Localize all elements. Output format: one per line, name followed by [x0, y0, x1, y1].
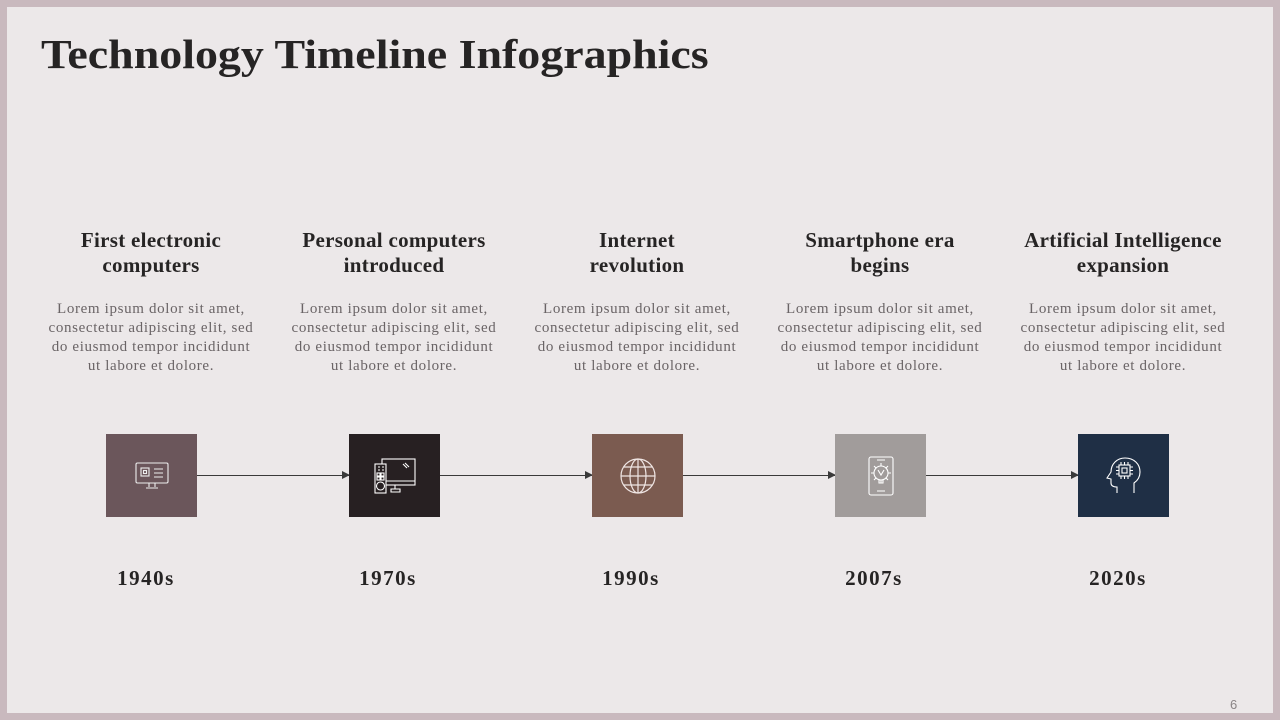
- text block: 1990s: Internet: [599, 228, 675, 252]
- text block: 2020s: [1021, 228, 1225, 374]
- text block: 1990s: revolution: [590, 253, 684, 277]
- page number: 6: [1230, 697, 1237, 712]
- text block: 1940s: computers: [102, 253, 200, 277]
- text block: 2020s: expansion: [1077, 253, 1169, 277]
- text block: 2007s: ut labore et dolore.: [817, 358, 943, 374]
- icon: AI head: [1078, 434, 1169, 517]
- text block: 2020s: Lorem ipsum dolor sit amet,: [1029, 301, 1217, 317]
- text block: 2007s: Lorem ipsum dolor sit amet,: [786, 301, 974, 317]
- text block: 1970s: Personal computers: [302, 228, 486, 252]
- text block: 1970s: do eiusmod tempor incididunt: [295, 339, 493, 355]
- text block: 1990s: do eiusmod tempor incididunt: [538, 339, 736, 355]
- text block: 1970s: consectetur adipiscing elit, sed: [292, 320, 496, 336]
- icon: smartphone with gear: [835, 434, 926, 517]
- arrow 2: [440, 475, 592, 476]
- text block: 1990s: consectetur adipiscing elit, sed: [535, 320, 739, 336]
- text block: 2007s: consectetur adipiscing elit, sed: [778, 320, 982, 336]
- text block: 1970s: [292, 228, 496, 374]
- text block: 1940s: consectetur adipiscing elit, sed: [49, 320, 253, 336]
- icon: computer with chip: [106, 434, 197, 517]
- text block: 2007s: Smartphone era: [805, 228, 955, 252]
- text block: 1940s: [49, 228, 253, 374]
- text block: 2020s: do eiusmod tempor incididunt: [1024, 339, 1222, 355]
- text block: 1970s: introduced: [344, 253, 444, 277]
- text block: 2020s: consectetur adipiscing elit, sed: [1021, 320, 1225, 336]
- text block: 1940s: Lorem ipsum dolor sit amet,: [57, 301, 245, 317]
- text block: 2007s: do eiusmod tempor incididunt: [781, 339, 979, 355]
- title: Technology Timeline Infographics: [41, 31, 709, 77]
- text block: 1990s: ut labore et dolore.: [574, 358, 700, 374]
- text block: 1940s: ut labore et dolore.: [88, 358, 214, 374]
- text block: 2020s: Artificial Intelligence: [1024, 228, 1222, 252]
- text block: 1970s: Lorem ipsum dolor sit amet,: [300, 301, 488, 317]
- text block: 1990s: [535, 228, 739, 374]
- year 1990s: 1990s: [602, 566, 660, 590]
- text block: 2020s: ut labore et dolore.: [1060, 358, 1186, 374]
- text block: 2007s: begins: [850, 253, 910, 277]
- text block: 1940s: do eiusmod tempor incididunt: [52, 339, 250, 355]
- icon: desktop computer: [349, 434, 440, 517]
- year 1970s: 1970s: [359, 566, 417, 590]
- text block: 1940s: First electronic: [81, 228, 221, 252]
- text block: 2007s: [778, 228, 982, 374]
- arrow 3: [683, 475, 835, 476]
- arrow 4: [926, 475, 1078, 476]
- arrow 1: [197, 475, 349, 476]
- year 2007s: 2007s: [845, 566, 903, 590]
- text block: 1970s: ut labore et dolore.: [331, 358, 457, 374]
- text block: 1990s: Lorem ipsum dolor sit amet,: [543, 301, 731, 317]
- year 1940s: 1940s: [117, 566, 175, 590]
- year 2020s: 2020s: [1089, 566, 1147, 590]
- icon: globe: [592, 434, 683, 517]
